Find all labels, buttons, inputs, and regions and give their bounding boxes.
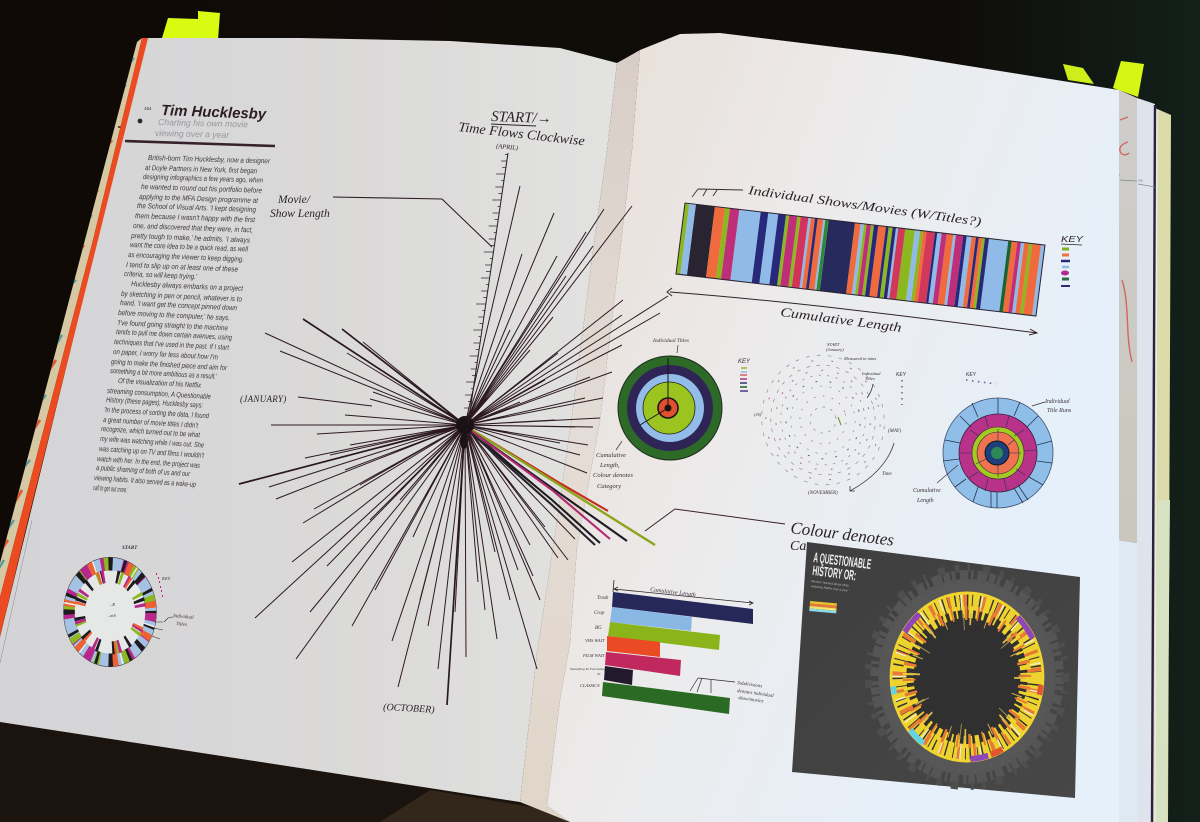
bar axis (613, 580, 753, 605)
poster subtitle: Movies I learned about while (811, 579, 849, 588)
bar axis title: Cumulative Length (650, 587, 696, 599)
body text (93, 153, 271, 494)
bar labels: BG (595, 626, 602, 631)
colour stripe chart (667, 183, 1084, 335)
body text: viewing habits. It also served as a wake-up (94, 473, 196, 489)
bar labels: VHS WAIT (585, 638, 605, 643)
stacked page edges at right (1100, 90, 1171, 822)
body text: streaming consumption, A Questionable (107, 386, 211, 401)
chart title: Individual Shows/Movies (W/Titles?) (746, 183, 982, 229)
body text: was catching up on TV and films I wouldn't (99, 444, 205, 460)
key (1061, 235, 1084, 286)
callout: movie show length (270, 194, 492, 247)
dotted labels: Individual (861, 371, 881, 376)
body text: watch with her. In the end, the project was (97, 454, 200, 470)
body text: by sketching in pen or pencil, whatever is to (121, 289, 242, 303)
january label (240, 394, 372, 406)
body text: going to make the finished piece and aim for (111, 357, 228, 372)
bar sketch: cumulative length by category: denotes individual (737, 689, 774, 699)
body text: criteria, so will keep trying.' (124, 269, 198, 281)
concentric sketch: individual title runs: Length (916, 498, 934, 504)
left page (0, 38, 617, 802)
body text: History (these pages), Hucklesby says: (106, 395, 203, 410)
small radial sketch: Titles (176, 622, 187, 628)
bar labels: Something To Fall Asleep (570, 667, 606, 671)
poster legend (809, 601, 837, 613)
dotted rings (747, 341, 899, 499)
concentric sketch: category rings: Colour denotes (593, 472, 633, 479)
small radial sketch: KEY (161, 576, 171, 581)
bar labels: FILM WAIT (582, 653, 605, 658)
title leader (692, 189, 743, 197)
cumulative label: Cumulative Length (780, 304, 903, 335)
body text: 'In the process of sorting the data, I found (104, 405, 210, 420)
poster: a questionable history: watching Netflix over a year (811, 584, 848, 592)
small radial sketch: –R (109, 602, 115, 607)
rings with spokes (943, 398, 1053, 508)
time flows label: Time Flows Clockwise (458, 119, 586, 148)
thin radial lines (239, 186, 668, 687)
radial time axis with ticks (464, 153, 508, 425)
body text: Of the visualization of his Netflix (118, 376, 201, 390)
body text: tends to pull me down certain avenues, using (116, 327, 233, 342)
stacked page edges at right: 155 (1102, 166, 1109, 171)
header rule (125, 141, 275, 146)
small radial sketch (64, 546, 194, 666)
ring key (738, 359, 751, 391)
bar sketch: cumulative length by category: Subdivisions (737, 681, 763, 690)
bar labels: Trash (597, 596, 609, 601)
concentric sketch: category rings: Category (597, 483, 621, 490)
heavy radial lines (239, 319, 465, 705)
sketch labels: start and time direction (458, 109, 586, 152)
body text: my wife was watching while I was out. She (100, 434, 204, 450)
bar labels: Crap (594, 611, 605, 616)
body text: before moving to the computer,' he says. (118, 308, 230, 322)
sticky tab: right large (1113, 61, 1144, 97)
body text: Hucklesby always embarks on a project (131, 279, 244, 293)
body text: want the core idea to be a quick read, as well (130, 240, 248, 254)
radial sketch: central starburst (239, 186, 668, 705)
header bullet (138, 119, 142, 123)
poster: a questionable history: A QUESTIONABLE (813, 549, 872, 572)
sketch key dots (156, 574, 163, 596)
body text: 'I've found going straight to the machine (117, 318, 228, 332)
stripes (676, 203, 1045, 316)
body text: on paper, I worry far less about how I'm (113, 347, 218, 361)
sticky tabs: left (162, 11, 220, 40)
stacked page edges at right: 79 (1138, 178, 1143, 183)
concentric sketch: category rings: Cumulative (596, 452, 626, 459)
body text: applying to the MFA Design programme at (139, 192, 259, 205)
right page (547, 33, 1119, 822)
dotted labels: (January) (826, 347, 844, 352)
body text: recognize, which turned out to be what (101, 424, 201, 439)
START heading: START/→ (491, 109, 552, 127)
april label: (APRIL) (496, 143, 518, 152)
body text: I tend to slip up on at least one of these (126, 260, 238, 274)
subtitle: viewing over a year (155, 128, 230, 140)
grey outer spikes (868, 568, 1066, 786)
body text: a great number of movie titles I didn't (103, 415, 199, 430)
title runs key (966, 372, 996, 384)
time arrow (850, 384, 894, 491)
poster: a questionable history (792, 542, 1080, 798)
callout: colour denotes: Colour denotes (790, 518, 895, 550)
small radial sketch: –mS (107, 613, 116, 618)
poster background (792, 542, 1080, 798)
body text: designing infographics a few years ago, when (143, 172, 263, 185)
coloured bars (891, 593, 1043, 761)
cumulative arrow (667, 288, 1037, 335)
january label: (JANUARY) (240, 394, 287, 404)
poster: a questionable history: HISTORY OR: (812, 562, 857, 583)
callout: colour denotes (645, 509, 895, 554)
decorative patterned book edge (0, 38, 142, 597)
dotted labels (754, 342, 901, 496)
bar labels: To (597, 672, 601, 676)
page header (125, 102, 275, 146)
subdivision note (690, 678, 735, 693)
sticky tab: right small (1063, 64, 1094, 84)
dotted sketch: spiral dots (747, 341, 907, 499)
radial ring chart (868, 568, 1066, 786)
callout: colour denotes: Ca (790, 539, 806, 554)
dotted labels: (NOVEMBER) (808, 491, 838, 496)
body text: a public shaming of both of us and our (96, 463, 191, 478)
concentric sketch: individual title runs (913, 372, 1072, 508)
subtitle (155, 117, 248, 140)
sketch ring (64, 558, 156, 666)
dotted labels: (MAY) (888, 429, 901, 434)
sketch labels: START (122, 546, 138, 551)
body text: one, and discovered that they were, in fact, (133, 221, 253, 234)
concentric sketch: category rings (593, 338, 751, 490)
concentric sketch: individual title runs: Title Runs (1047, 408, 1072, 414)
body text: as encouraging the viewer to keep digging. (128, 250, 244, 264)
ring key: KEY (738, 359, 751, 365)
body text: British-born Tim Hucklesby, now a designer (148, 153, 271, 165)
small radial sketch: Individual (172, 614, 194, 621)
rings (618, 356, 722, 460)
title: Tim Hucklesby (161, 102, 267, 123)
bar labels: CLASSICS (580, 683, 600, 688)
bar labels (570, 596, 609, 688)
dotted key: KEY (896, 372, 907, 378)
concentric sketch: category rings: Length, (599, 462, 620, 469)
concentric sketch: individual title runs: Cumulative (913, 488, 941, 494)
body text: call to get out more.' (93, 483, 129, 494)
right page gutter band (520, 50, 640, 822)
title runs labels: Individual (1044, 399, 1070, 405)
dotted labels: Titles (865, 376, 875, 381)
bars (612, 592, 753, 624)
callout: movie show length: Show Length (270, 208, 330, 220)
bar sketch: cumulative length by category: show/movies (738, 696, 764, 705)
body text: techniques that I've used in the past. If I start (114, 337, 230, 352)
hairline inside border (0, 520, 32, 663)
subtitle: Charting his own movie (158, 117, 248, 129)
body text: hand. 'I want get the concept pinned down (120, 298, 237, 312)
october label: (OCTOBER) (383, 702, 435, 716)
ring labels: Individual Titles (652, 338, 689, 344)
dotted labels: Measured in mins (843, 356, 876, 361)
dotted labels: (JS) (754, 412, 762, 417)
dotted key (896, 372, 907, 405)
page number: 154 (144, 106, 152, 111)
coloured lines (470, 430, 655, 545)
body text: something a bit more ambitious as a result.' (110, 366, 218, 381)
body text: them because I wasn't happy with the first (135, 211, 256, 224)
body text: he wanted to round out his portfolio before (141, 182, 262, 195)
dotted labels: Time (882, 472, 893, 477)
callout: movie show length: Movie/ (277, 194, 312, 206)
orange page border (0, 38, 148, 637)
title runs key: KEY (966, 372, 977, 378)
body text: the School of Visual Arts. 'I kept designing (137, 201, 257, 214)
key: KEY (1061, 235, 1084, 244)
bar sketch: cumulative length by category (570, 580, 774, 714)
START underline (491, 124, 536, 126)
dotted labels: START (827, 342, 840, 347)
body text: at Doyle Partners in New York, first began (145, 163, 257, 175)
body text: pretty tough to make,' he admits. 'I always (130, 231, 250, 245)
centre blob (456, 416, 474, 449)
